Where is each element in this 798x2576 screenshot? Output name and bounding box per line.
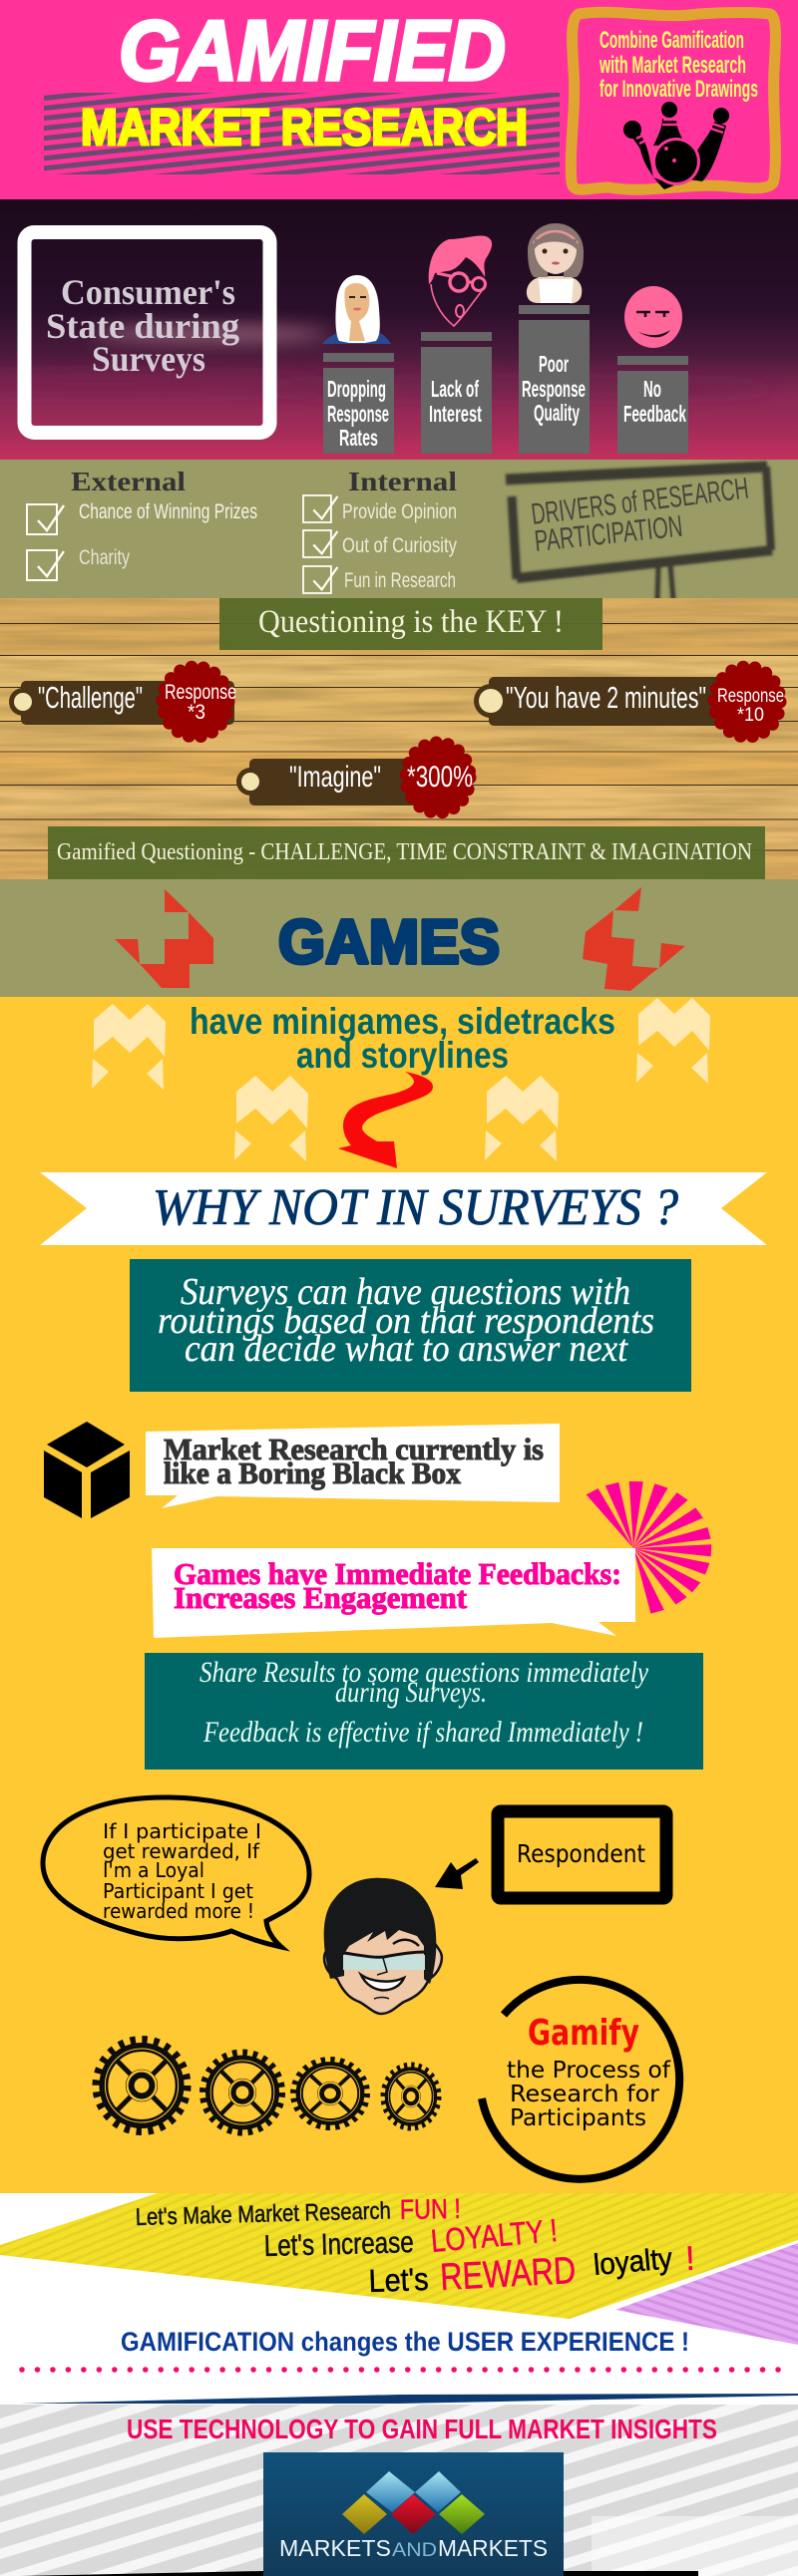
column: dropping response rates <box>323 353 394 454</box>
logo: marketsandmarkets <box>263 2452 564 2576</box>
icon: right red shape <box>583 887 685 991</box>
column: lack of interest: Interest <box>429 401 482 427</box>
tag: challenge <box>9 667 236 737</box>
circle callout: gamify: Participants <box>510 2105 646 2131</box>
logo: marketsandmarkets: MARKETS <box>438 2535 548 2561</box>
heading: Consumer's State during Surveys: Consumer's <box>61 272 235 312</box>
slogans: Let's Increase <box>263 2226 414 2263</box>
text: minigames <box>190 1001 615 1076</box>
icon: black box <box>44 1422 130 1518</box>
callout: share results <box>145 1653 703 1770</box>
arrow: red curved <box>338 1072 433 1168</box>
speech bubble: participant thought: Participant I get <box>103 1879 253 1903</box>
slogans: Let's <box>368 2261 429 2299</box>
callout: routings <box>130 1259 691 1392</box>
icon: respondent face <box>324 1878 442 2014</box>
banner: gamified questioning <box>48 826 765 879</box>
speech bubble: participant thought: rewarded more ! <box>103 1899 254 1923</box>
speech bubble: black box <box>146 1424 560 1508</box>
gears <box>98 2042 438 2130</box>
column: poor response quality <box>519 305 590 454</box>
panel: consumer's state <box>0 199 798 459</box>
logo: marketsandmarkets: AND <box>392 2540 437 2561</box>
panel: closing messages <box>0 2193 798 2405</box>
badge: 300 percent <box>406 743 473 812</box>
yellow stripes band <box>0 2193 798 2319</box>
title: Market Research: MARKET RESEARCH <box>81 99 528 156</box>
column: dropping response rates: Rates <box>339 425 378 451</box>
text: user experience: GAMIFICATION changes the USER EXPERIENCE ! <box>121 2327 689 2357</box>
panel: footer <box>0 2394 798 2576</box>
column: lack of interest <box>421 332 492 454</box>
tag: challenge: "Challenge" <box>38 680 143 715</box>
internal checklist <box>303 495 457 593</box>
panel: drivers of research participation <box>0 459 798 600</box>
column: lack of interest: Lack of <box>431 376 479 402</box>
purple stripes band <box>615 2243 798 2345</box>
badge: response x3 <box>163 667 236 737</box>
text: minigames: have minigames, sidetracks <box>190 1001 615 1042</box>
icon: brown-haired girl <box>527 223 584 303</box>
badge: response x10: *10 <box>737 705 764 726</box>
column: poor response quality: Response <box>522 376 586 402</box>
label box: respondent <box>498 1811 666 1898</box>
callout: share results: during Surveys. <box>335 1676 487 1709</box>
badge: response x3: Response <box>165 681 236 704</box>
external checklist <box>27 500 257 580</box>
column: dropping response rates: Dropping <box>327 376 386 402</box>
heading: Consumer's State during Surveys: State during <box>46 306 239 346</box>
speech bubble: participant thought: If I participate I <box>103 1819 261 1843</box>
circle callout: gamify: Research for <box>510 2082 660 2107</box>
heading: internal: Internal <box>348 467 458 496</box>
callout text <box>598 27 758 103</box>
circle callout: gamify: Gamify <box>528 2013 639 2054</box>
icon: blonde woman <box>322 275 391 344</box>
slogans: FUN ! <box>400 2193 461 2225</box>
heading: games: GAMES <box>278 908 500 977</box>
heading: Consumer's State during Surveys <box>46 272 239 379</box>
slogans: REWARD <box>439 2250 577 2299</box>
ribbon: why not in surveys: WHY NOT IN SURVEYS ? <box>153 1179 678 1236</box>
badge: response x10 <box>714 667 784 737</box>
slogans: Let's Make Market Research <box>135 2197 391 2231</box>
tag: you have 2 minutes <box>474 667 784 737</box>
badge: 300 percent: *300% <box>407 761 473 794</box>
speech bubble: participant thought: I'm a Loyal <box>103 1858 204 1882</box>
sign: drivers of research participation: PARTICIPATION <box>533 510 684 558</box>
title: Gamified: GAMIFIED <box>119 4 506 99</box>
tag: imagine <box>236 743 473 812</box>
heading: external: External <box>71 467 187 496</box>
icon: pink-haired man <box>429 236 492 326</box>
heading: Consumer's State during Surveys: Surveys <box>92 339 205 379</box>
column: no feedback: No <box>643 376 661 402</box>
slogans <box>135 2193 695 2299</box>
tag: imagine: "Imagine" <box>289 761 381 794</box>
banner: questioning is the key: Questioning is the KEY ! <box>258 604 564 640</box>
speech bubble: participant thought: get rewarded, If <box>103 1839 260 1863</box>
circle callout: gamify <box>482 1980 679 2179</box>
speech bubble: immediate feedback <box>152 1548 635 1638</box>
speech bubble: immediate feedback: Games have Immediate Feedbacks: <box>174 1556 621 1591</box>
speech bubble: black box: Market Research currently is <box>164 1432 544 1466</box>
callout: routings: routings based on that respondents <box>158 1300 654 1342</box>
text: minigames: and storylines <box>296 1035 509 1076</box>
internal checklist: Out of Curiosity <box>342 534 457 557</box>
circle callout: gamify: the Process of <box>507 2058 671 2084</box>
ribbon: why not in surveys <box>40 1172 767 1245</box>
icon: bowling pins and ball <box>623 102 729 189</box>
arrow: respondent to face <box>435 1858 479 1889</box>
slogans: ! <box>684 2240 695 2278</box>
external checklist: Chance of Winning Prizes <box>79 500 257 523</box>
gold frame callout <box>571 12 775 189</box>
speech bubble: participant thought <box>43 1797 309 1947</box>
speech bubble: immediate feedback: Increases Engagement <box>174 1580 468 1615</box>
column: no feedback <box>617 356 688 454</box>
icon: radial burst <box>587 1481 711 1614</box>
column: dropping response rates: Response <box>327 401 389 427</box>
callout: routings: can decide what to answer next <box>185 1328 628 1370</box>
column: poor response quality: Poor <box>539 351 569 377</box>
panel: questioning wood background <box>0 598 798 879</box>
panel: yellow body <box>0 997 798 2193</box>
internal checklist: Provide Opinion <box>342 500 457 523</box>
label box: respondent: Respondent <box>517 1839 645 1868</box>
slogans: loyalty <box>593 2242 673 2282</box>
speech bubble: black box: like a Boring Black Box <box>164 1455 461 1490</box>
icon: left red shape <box>115 889 213 988</box>
internal checklist: Fun in Research <box>344 569 456 592</box>
header panel <box>0 0 798 199</box>
column: poor response quality: Quality <box>534 400 580 426</box>
logo: marketsandmarkets: MARKETS <box>279 2535 391 2561</box>
external checklist: Charity <box>79 546 130 569</box>
sign: drivers of research participation <box>506 467 772 600</box>
callout: share results: Share Results to some questions immediately <box>200 1656 649 1689</box>
badge: response x3: *3 <box>188 701 205 724</box>
slogans: LOYALTY ! <box>429 2212 559 2259</box>
banner: questioning is the key <box>219 598 602 650</box>
decorative chevrons <box>92 998 710 1161</box>
panel: games <box>0 826 798 997</box>
striped band behind subtitle <box>44 93 560 174</box>
callout: routings: Surveys can have questions with <box>181 1271 630 1313</box>
callout: share results: Feedback is effective if shared Immediately ! <box>202 1716 643 1749</box>
column: no feedback: Feedback <box>623 401 686 427</box>
white frame <box>24 232 269 433</box>
tag: you have 2 minutes: "You have 2 minutes" <box>506 680 706 715</box>
icon: smiley face <box>624 286 682 348</box>
